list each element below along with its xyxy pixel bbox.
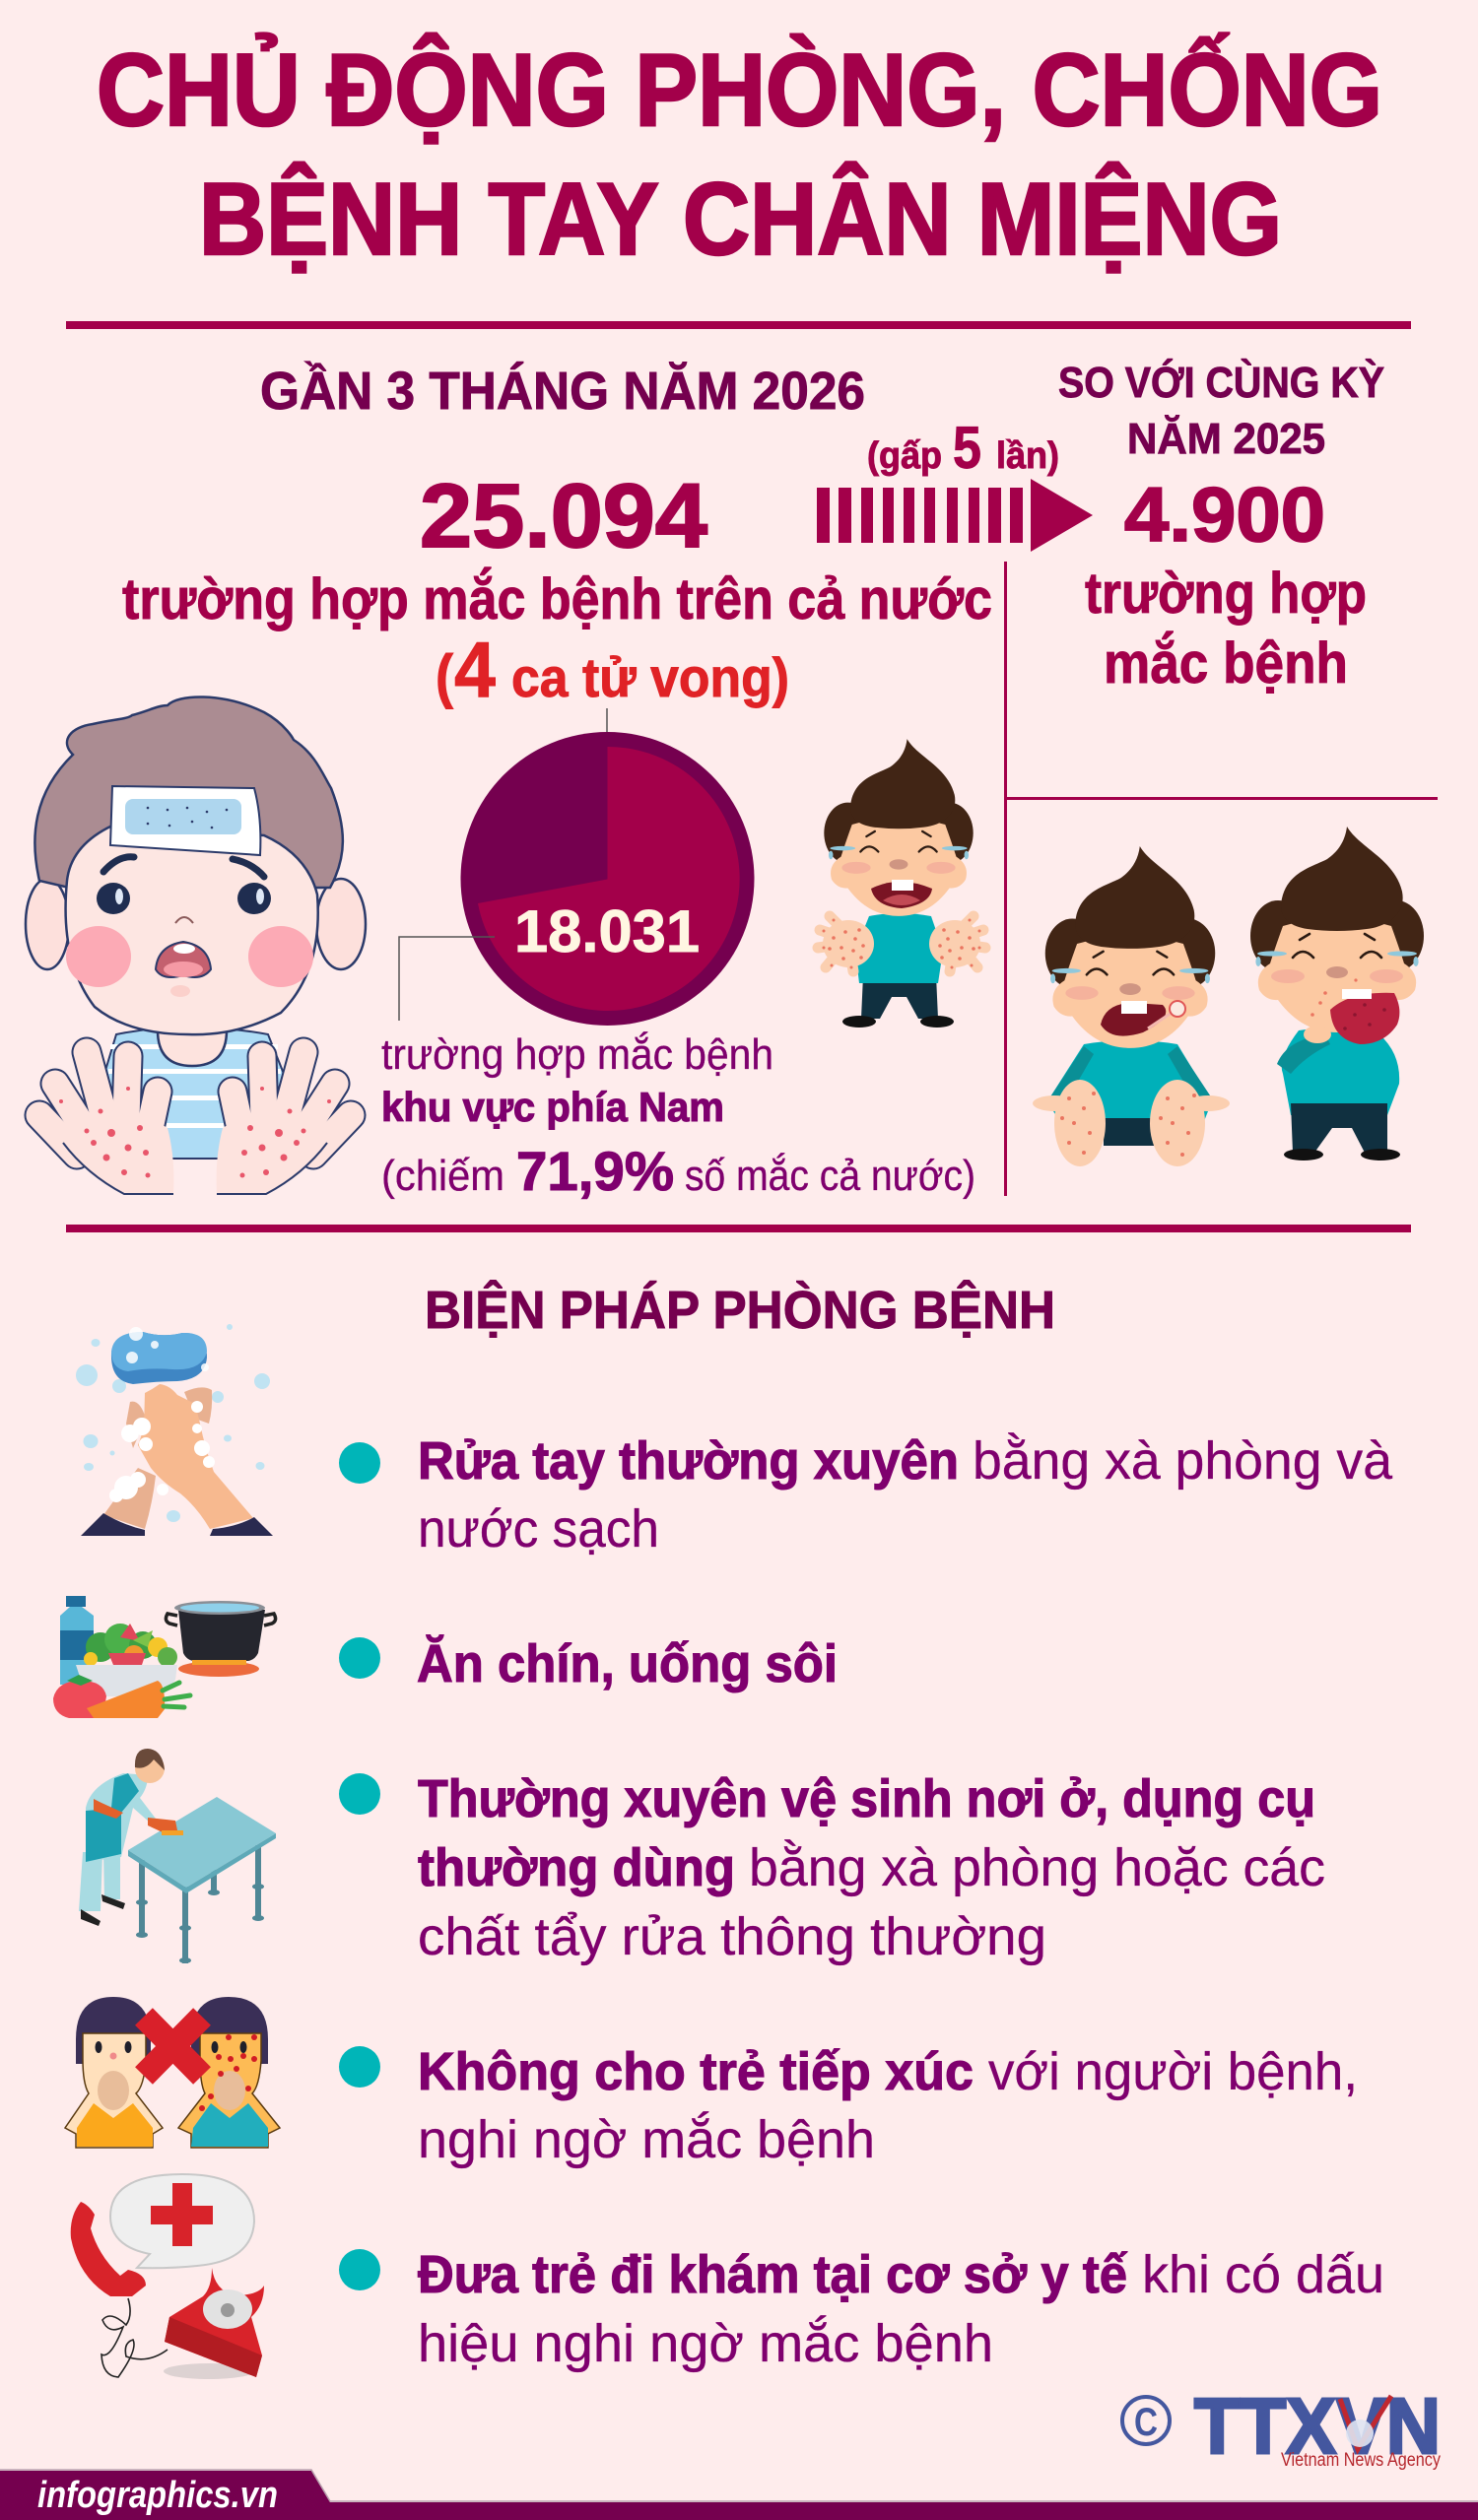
sick child	[191, 1997, 268, 2064]
text: đưa trẻ đi khám: khi có dấu	[1142, 2245, 1384, 2304]
text: đưa trẻ đi khám	[418, 2245, 1384, 2373]
text block: southern region: (chiếm	[381, 1152, 504, 1200]
big number 25.094: 25.094	[420, 466, 707, 566]
healthy child	[76, 1997, 151, 2064]
text: không cho trẻ tiếp xúc: với người bệnh,	[988, 2042, 1358, 2101]
hair	[34, 696, 343, 888]
heading: so với cùng kỳ năm 2025	[1058, 358, 1384, 463]
deaths callout: ca tử vong)	[511, 646, 789, 708]
text block: southern region: số mắc cả nước)	[685, 1152, 975, 1200]
big number 4.900: 4.900	[1124, 471, 1325, 558]
text: rửa tay	[418, 1431, 1393, 1558]
heading: so với cùng kỳ năm 2025: NĂM 2025	[1127, 414, 1325, 463]
title: CHỦ ĐỘNG PHÒNG, CHỐNG	[97, 33, 1382, 148]
arrow: 5 times	[817, 479, 1093, 552]
icon: sick boy with fever patch and rash on hands	[26, 696, 366, 1194]
text: rửa tay: nước sạch	[418, 1499, 659, 1558]
pie chart: southern share	[399, 708, 755, 1026]
icon: washing hands with sponge	[76, 1324, 273, 1536]
footer band	[0, 2470, 1478, 2520]
label: gấp 5 lần	[867, 415, 1059, 481]
table legs	[136, 1845, 264, 1963]
label: gấp 5 lần: lần)	[996, 435, 1059, 477]
logo: TTXVN copyright: Vietnam News Agency	[1281, 2450, 1441, 2471]
text: vệ sinh	[418, 1769, 1325, 1966]
logo: TTXVN copyright: TTXVN	[1194, 2382, 1441, 2470]
cheeks	[66, 926, 131, 987]
text block: southern region	[381, 1030, 975, 1202]
nose	[175, 917, 193, 923]
bullet 1	[339, 1442, 380, 1484]
forehead patch	[110, 786, 260, 855]
icon: boy with sore tongue	[1250, 827, 1424, 1161]
bullet 5	[339, 2249, 380, 2290]
mouth	[156, 942, 211, 977]
text: không cho trẻ tiếp xúc	[418, 2042, 1358, 2169]
bullet 3	[339, 1773, 380, 1815]
case description 2025: trường hợp	[1085, 562, 1367, 626]
deaths callout	[436, 626, 789, 713]
heading: biện pháp phòng bệnh: BIỆN PHÁP PHÒNG BỆNH	[425, 1280, 1055, 1340]
text: vệ sinh: chất tẩy rửa thông thường	[418, 1907, 1046, 1966]
icon: red X	[144, 2017, 202, 2076]
bullet 4	[339, 2046, 380, 2088]
case description 2025: mắc bệnh	[1104, 631, 1348, 696]
footer site name: infographics.vn	[37, 2475, 278, 2516]
icon: crying boy with rash hands	[818, 739, 985, 1028]
logo: TTXVN copyright: C	[1134, 2401, 1158, 2444]
hands	[39, 1052, 173, 1194]
label: gấp 5 lần: (gấp	[867, 435, 942, 477]
text: vệ sinh: bằng xà phòng hoặc các	[749, 1838, 1325, 1897]
panel: comparison 2025	[817, 358, 1384, 696]
ears	[26, 879, 69, 969]
icon: telephone and medical cross	[71, 2174, 264, 2379]
title: BỆNH TAY CHÂN MIỆNG	[199, 163, 1282, 277]
text: đưa trẻ đi khám: Đưa trẻ đi khám tại cơ sở y tế	[418, 2245, 1128, 2304]
case description 2025	[1085, 562, 1367, 696]
value 18.031: 18.031	[514, 898, 700, 964]
title	[97, 33, 1382, 277]
bullet 2	[339, 1637, 380, 1679]
text block: southern region: 71,9%	[516, 1140, 674, 1202]
panel: current 2026 statistics	[122, 362, 992, 713]
heading: gần 3 tháng năm 2026: GẦN 3 THÁNG NĂM 2026	[260, 362, 865, 421]
deaths callout: 4	[454, 626, 496, 713]
text: ăn chín uống sôi: Ăn chín, uống sôi	[417, 1634, 838, 1693]
text: đưa trẻ đi khám: hiệu nghi ngờ mắc bệnh	[418, 2314, 993, 2373]
face	[66, 826, 318, 1034]
label: gấp 5 lần: 5	[953, 415, 981, 481]
icon: avoid contact with sick child	[65, 1997, 280, 2148]
eyebrows and eyes	[103, 857, 264, 877]
text: không cho trẻ tiếp xúc: nghi ngờ mắc bệnh	[418, 2110, 875, 2169]
text block: southern region: trường hợp mắc bệnh	[381, 1030, 773, 1079]
text: không cho trẻ tiếp xúc: Không cho trẻ tiếp xúc	[418, 2042, 974, 2101]
shirt	[99, 1027, 292, 1159]
text: vệ sinh: Thường xuyên vệ sinh nơi ở, dụng cụ	[418, 1769, 1315, 1828]
person	[103, 1852, 120, 1899]
text: rửa tay: Rửa tay thường xuyên	[418, 1431, 959, 1491]
case description: trường hợp mắc bệnh trên cả nước	[122, 567, 992, 631]
heading: so với cùng kỳ năm 2025: SO VỚI CÙNG KỲ	[1058, 358, 1384, 407]
text: rửa tay: bằng xà phòng và	[973, 1431, 1393, 1491]
icon: person cleaning table	[79, 1749, 276, 1963]
deaths callout: (	[436, 643, 453, 709]
text: vệ sinh: thường dùng	[418, 1838, 735, 1897]
text block: southern region: khu vực phía Nam	[381, 1084, 724, 1130]
icon: food and boiling pot	[53, 1596, 276, 1718]
icon: sitting boy with fever	[1033, 846, 1230, 1166]
